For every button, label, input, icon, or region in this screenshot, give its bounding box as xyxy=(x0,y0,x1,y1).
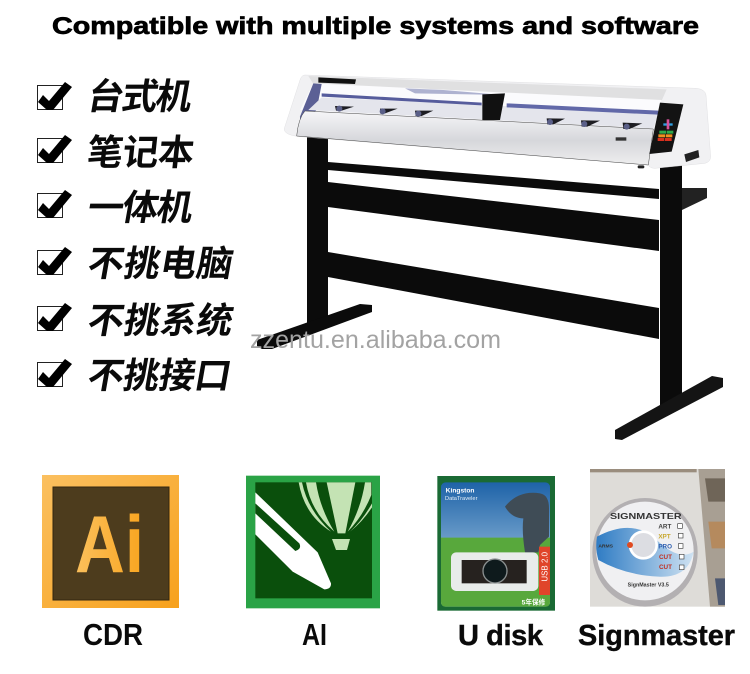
item: any port: 不挑接口 xyxy=(85,355,235,396)
watermark: zzentu.en.alibaba.com xyxy=(250,326,501,354)
icon: SignMaster disc: PRO xyxy=(658,544,672,551)
icon: U disk package: 5年保修 xyxy=(522,597,546,606)
icon: U disk package xyxy=(437,476,555,611)
icon: U disk package: Kingston xyxy=(446,487,475,494)
icon: SignMaster disc: ARMS xyxy=(598,544,614,550)
icon: SignMaster disc: SignMaster V3.5 xyxy=(628,583,669,589)
icon: SignMaster disc xyxy=(590,469,725,607)
title: Compatible with multiple systems and software xyxy=(52,13,699,40)
icon: Adobe Illustrator: Ai xyxy=(75,500,144,590)
label: CDR: CDR xyxy=(83,617,143,652)
item: desktop: 台式机 xyxy=(85,76,196,117)
icon: CorelDRAW xyxy=(246,476,380,608)
icon: SignMaster disc: CUT xyxy=(659,554,672,561)
icon: Adobe Illustrator xyxy=(42,475,179,608)
item: laptop: 笔记本 xyxy=(85,132,196,173)
cutting plotter xyxy=(257,75,723,440)
icon: SignMaster disc: ART xyxy=(658,524,671,531)
icon: SignMaster disc: SIGNMASTER xyxy=(610,512,682,521)
icon: SignMaster disc: CUT xyxy=(659,564,672,571)
checklist xyxy=(38,76,237,396)
item: any system: 不挑系统 xyxy=(85,300,237,341)
plotter body xyxy=(284,75,711,168)
icon: U disk package: DataTraveler xyxy=(445,496,478,502)
label: Signmaster: Signmaster xyxy=(578,620,735,652)
label: AI: AI xyxy=(302,617,327,652)
plotter stand xyxy=(257,135,723,440)
item: all-in-one: 一体机 xyxy=(85,187,197,228)
icon: U disk package: USB 2.0 xyxy=(540,551,549,582)
icon: SignMaster disc: XPT xyxy=(658,533,671,540)
label: U disk: U disk xyxy=(458,620,544,652)
item: any computer: 不挑电脑 xyxy=(85,243,237,284)
